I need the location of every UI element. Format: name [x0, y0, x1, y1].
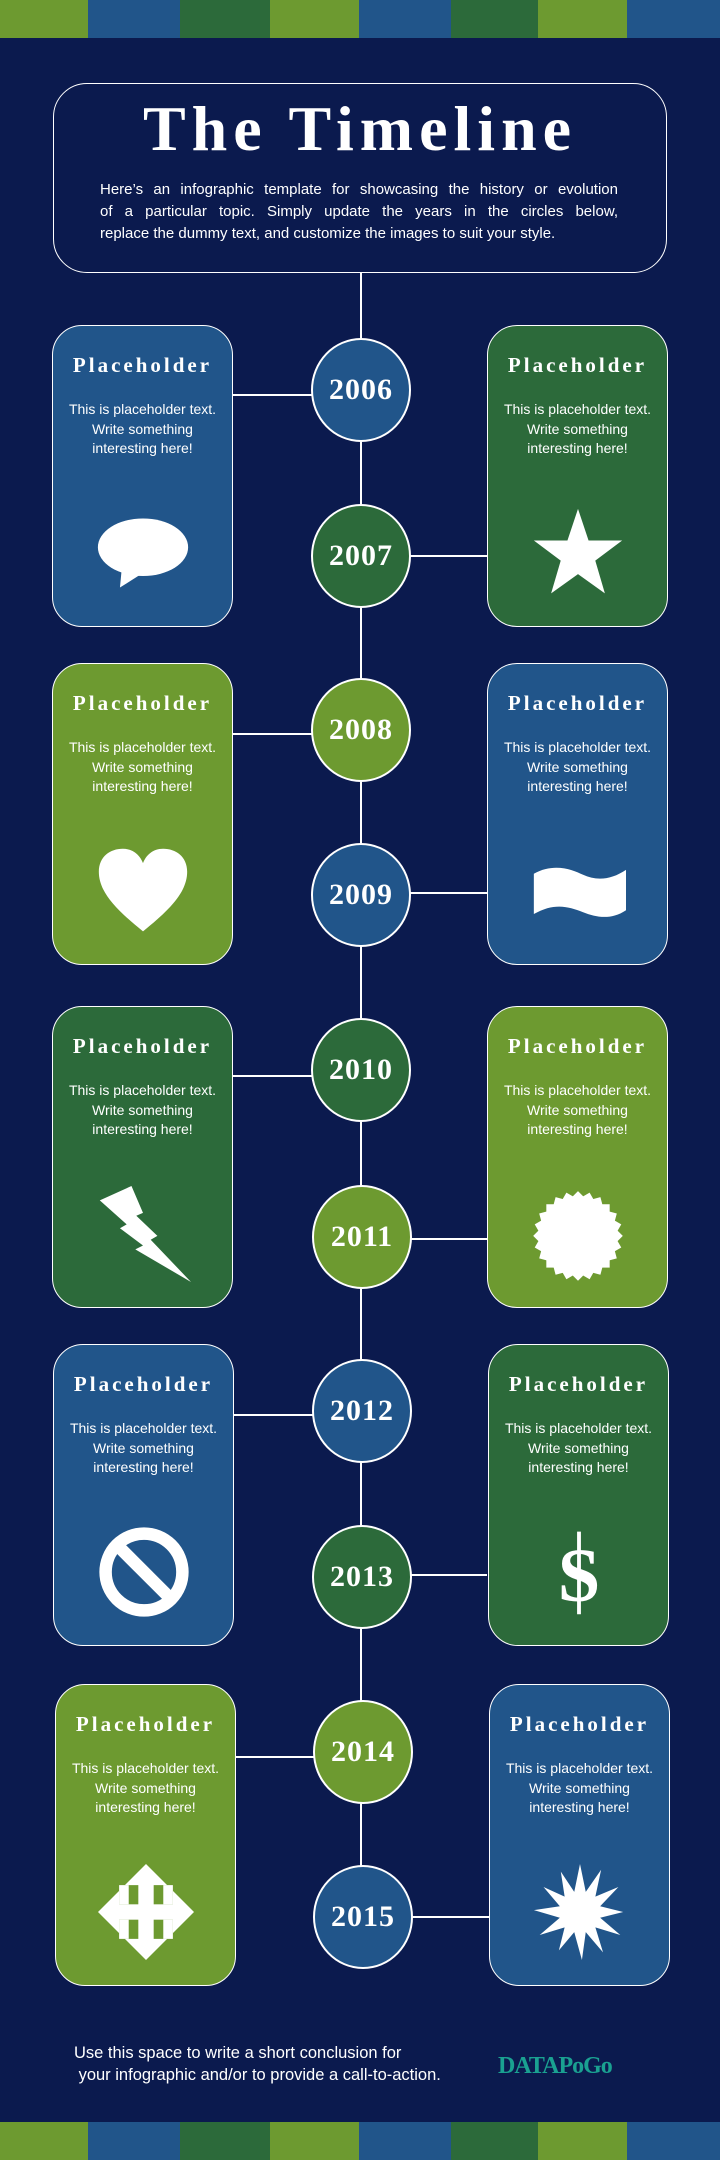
panel: 2011 right: This is placeholder text.: [504, 1082, 651, 1098]
panel: 2008 left: This is placeholder text.: [69, 739, 216, 755]
panel: 2007 right: Placeholder: [508, 353, 647, 377]
panel: 2010 left: Write something: [92, 1102, 193, 1118]
panel: 2012 left: This is placeholder text.: [70, 1420, 217, 1436]
panel: 2008 left: interesting here!: [92, 778, 193, 794]
panel: 2007 right: This is placeholder text.: [504, 401, 651, 417]
logo: DATAPoGo: [498, 2053, 612, 2079]
panel: 2006 left: Write something: [92, 420, 193, 436]
panel: 2013 right: Write something: [528, 1440, 629, 1456]
icon: flag: [534, 868, 626, 917]
text: 2010: [329, 1053, 393, 1086]
panel: 2006 left: interesting here!: [92, 440, 193, 456]
panel: 2007 right: Write something: [527, 420, 628, 436]
conclusion text: [74, 2044, 441, 2084]
icon: heart: [98, 848, 188, 932]
icon: lightning: [100, 1186, 191, 1282]
panel: 2012 left: Write something: [93, 1440, 194, 1456]
icon: star: [534, 509, 622, 594]
intro text: [100, 181, 618, 242]
panel: 2009 right: [487, 663, 668, 965]
text: 2012: [330, 1394, 394, 1427]
panel: 2008 left: Write something: [92, 758, 193, 774]
panel: 2006 left: Placeholder: [73, 353, 212, 377]
panel: 2015 right: This is placeholder text.: [506, 1760, 653, 1776]
panel: 2015 right: Placeholder: [510, 1712, 649, 1736]
conclusion text: Use this space to write a short conclusion for: [74, 2044, 401, 2062]
panel: 2007 right: [487, 325, 668, 627]
panel: 2008 left: Placeholder: [73, 691, 212, 715]
panel: 2009 right: Placeholder: [508, 691, 647, 715]
panel: 2013 right: interesting here!: [528, 1459, 629, 1475]
icon: move arrows: [98, 1864, 194, 1960]
panel: 2012 left: interesting here!: [93, 1459, 194, 1475]
title: The Timeline: [143, 93, 577, 164]
panel: 2011 right: interesting here!: [527, 1121, 628, 1137]
intro text: replace the dummy text, and customize the images to suit your style.: [100, 225, 555, 242]
panel: 2006 left: [52, 325, 233, 627]
icon: seal: [533, 1191, 623, 1281]
panel: 2010 left: [52, 1006, 233, 1308]
panel: 2008 left: [52, 663, 233, 965]
bottom stripe bar: [0, 2122, 720, 2160]
panel: 2012 left: Placeholder: [74, 1372, 213, 1396]
text: 2008: [329, 713, 393, 746]
panel: 2011 right: [487, 1006, 668, 1308]
panel: 2010 left: Placeholder: [73, 1034, 212, 1058]
panel: 2012 left: [53, 1344, 234, 1646]
panel: 2014 left: Placeholder: [76, 1712, 215, 1736]
panel: 2015 right: Write something: [529, 1780, 630, 1796]
text: 2014: [331, 1735, 395, 1768]
timeline vertical line: [360, 272, 362, 1917]
panel: 2014 left: This is placeholder text.: [72, 1760, 219, 1776]
icon: dollar: S: [558, 1533, 600, 1618]
panel: 2007 right: interesting here!: [527, 440, 628, 456]
top stripe bar: [0, 0, 720, 38]
panel: 2015 right: interesting here!: [529, 1799, 630, 1815]
year circles: 2006: [329, 373, 393, 406]
icon: speech bubble: [98, 518, 188, 588]
panel: 2011 right: Placeholder: [508, 1034, 647, 1058]
panel: 2014 left: [55, 1684, 236, 1986]
panel: 2015 right: [489, 1684, 670, 1986]
year circles: [311, 338, 411, 442]
title panel: [53, 83, 667, 273]
panel: 2014 left: interesting here!: [95, 1799, 196, 1815]
text: 2009: [329, 878, 393, 911]
panel: 2013 right: Placeholder: [509, 1372, 648, 1396]
panel: 2010 left: interesting here!: [92, 1121, 193, 1137]
panel: 2011 right: Write something: [527, 1102, 628, 1118]
panel: 2009 right: Write something: [527, 758, 628, 774]
text: 2013: [330, 1560, 394, 1593]
connectors: [233, 394, 313, 396]
panel: 2013 right: [488, 1344, 669, 1646]
icon: no sign: [99, 1527, 189, 1617]
panel: 2009 right: interesting here!: [527, 778, 628, 794]
panel: 2013 right: This is placeholder text.: [505, 1420, 652, 1436]
text: 2015: [331, 1900, 395, 1933]
conclusion text: your infographic and/or to provide a call-to-action.: [79, 2066, 441, 2084]
text: 2007: [329, 539, 393, 572]
panel: 2006 left: This is placeholder text.: [69, 401, 216, 417]
panel: 2014 left: Write something: [95, 1780, 196, 1796]
icon: explosion: [534, 1864, 623, 1960]
intro text: Here’s an infographic template for showcasing the history or evolution: [100, 181, 618, 198]
panel: 2009 right: This is placeholder text.: [504, 739, 651, 755]
text: 2011: [331, 1220, 393, 1253]
panel: 2010 left: This is placeholder text.: [69, 1082, 216, 1098]
intro text: of a particular topic. Simply update the years in the circles below,: [100, 203, 618, 220]
